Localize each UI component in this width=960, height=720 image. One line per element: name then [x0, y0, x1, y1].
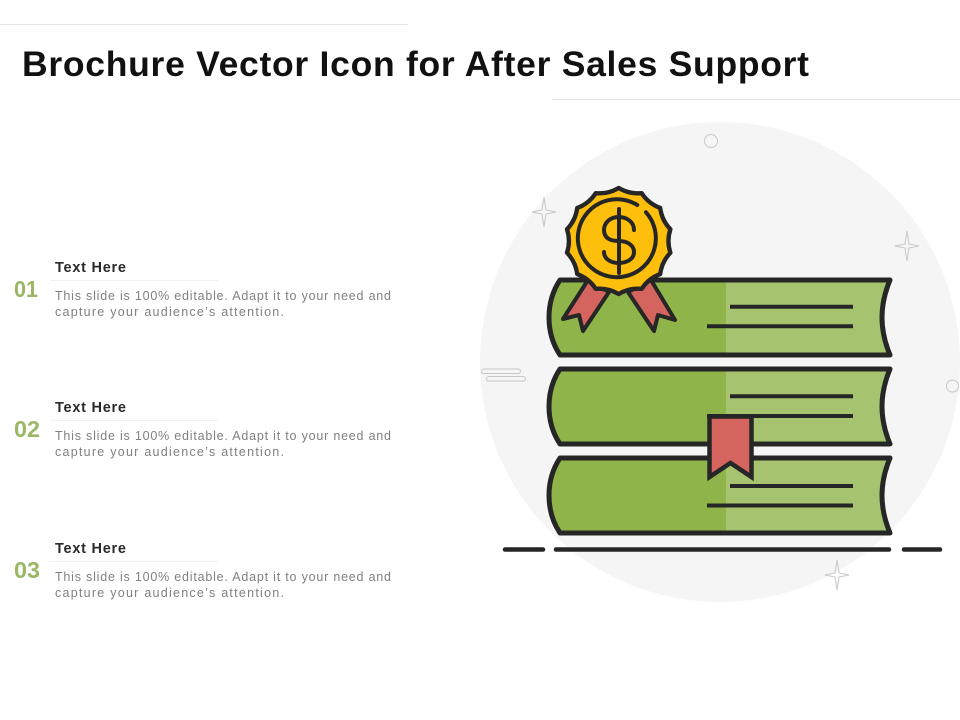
number 02: 02 — [14, 416, 40, 442]
list item 03 — [14, 541, 391, 600]
heading 03: Text Here — [55, 541, 126, 557]
ribbon: left — [563, 280, 609, 331]
book: top — [549, 280, 890, 355]
body text 03: This slide is 100% editable. Adapt it to your need and — [55, 570, 391, 584]
book: middle — [549, 369, 890, 444]
body text 02: This slide is 100% editable. Adapt it to your need and — [55, 429, 391, 443]
number 01: 01 — [14, 276, 38, 302]
body text 01: This slide is 100% editable. Adapt it to your need and — [55, 289, 391, 303]
ground line — [505, 547, 940, 552]
heading 01: Text Here — [55, 260, 126, 276]
book stack — [549, 280, 890, 533]
body text 03: capture your audience’s attention. — [55, 586, 284, 600]
decorative sparkles and circles — [482, 134, 958, 590]
icon: dollar seal — [567, 188, 670, 294]
list item 01 — [14, 260, 391, 319]
body text 02: capture your audience’s attention. — [55, 445, 284, 459]
heading 02: Text Here — [55, 400, 126, 416]
title: Brochure Vector Icon for After Sales Support — [22, 44, 809, 84]
body text 01: capture your audience’s attention. — [55, 305, 284, 319]
number 03: 03 — [14, 557, 40, 583]
book: bottom — [549, 458, 890, 533]
background circle — [480, 122, 960, 602]
ribbon: right — [628, 280, 675, 331]
bookmark — [710, 416, 752, 477]
list item 02 — [14, 400, 391, 459]
